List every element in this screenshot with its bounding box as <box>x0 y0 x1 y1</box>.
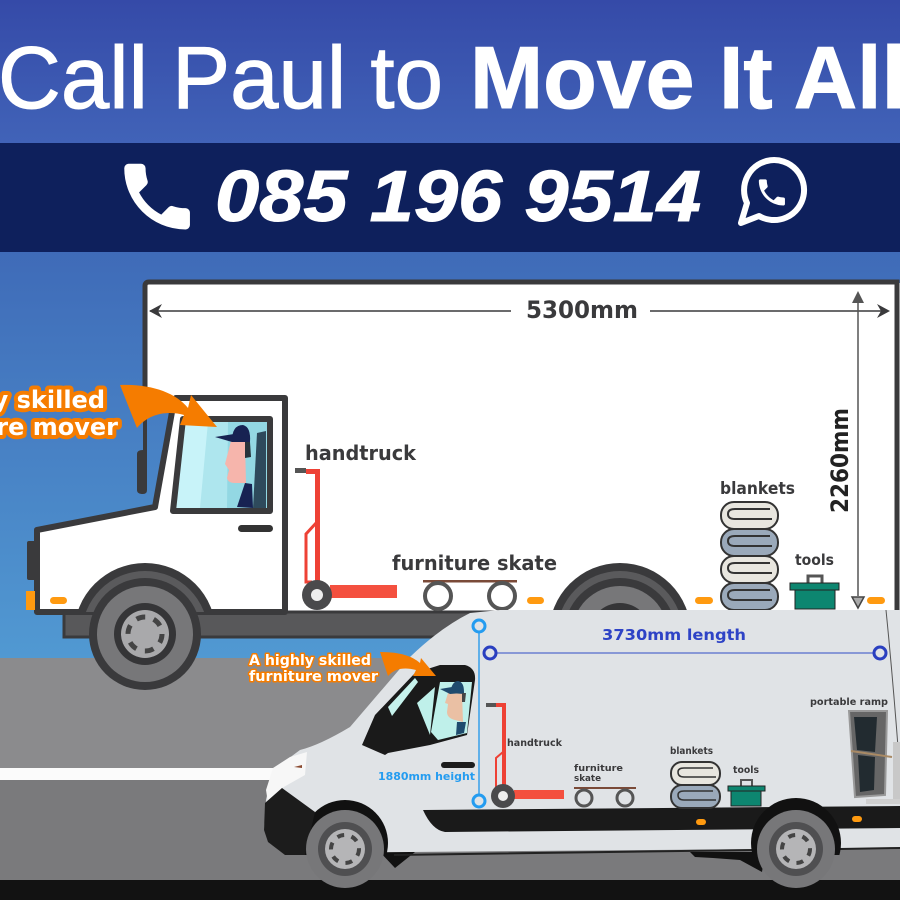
van furniture skate: skate <box>574 774 601 784</box>
truck chassis <box>64 612 900 637</box>
title: Move It All <box>470 28 900 127</box>
box truck <box>26 282 900 705</box>
van rear wheel <box>757 810 835 888</box>
phone number: 085 196 9514 <box>215 157 701 237</box>
truck front wheel <box>78 563 212 690</box>
van headlight <box>266 752 307 803</box>
van height dimension <box>378 620 485 807</box>
header banner <box>0 0 900 143</box>
van window with driver <box>362 665 475 755</box>
van wheel arches <box>305 798 841 855</box>
truck blankets: blankets <box>720 479 795 499</box>
arrow <box>380 652 436 676</box>
length dimension 5300mm <box>149 296 890 324</box>
van callout: A highly skilled <box>249 653 371 669</box>
truck tools <box>790 551 839 609</box>
van length dimension <box>484 626 886 659</box>
van front bumper <box>264 788 315 855</box>
truck cargo box <box>146 283 900 612</box>
van blankets <box>670 746 720 808</box>
length dimension 5300mm: 5300mm <box>526 296 638 324</box>
truck callout: skilled furniture mover <box>0 385 217 441</box>
van blankets: blankets <box>670 746 713 757</box>
van furniture skate: furniture <box>574 764 623 774</box>
icon: phone handset <box>125 165 189 229</box>
truck cab <box>37 398 285 612</box>
cab window with driver <box>173 419 270 511</box>
van lower trim <box>394 848 900 855</box>
truck handtruck <box>295 441 417 610</box>
van <box>249 610 900 888</box>
van body <box>264 610 900 853</box>
label: handtruck <box>305 441 417 465</box>
road background <box>0 252 900 900</box>
van handtruck: handtruck <box>507 738 563 749</box>
height dimension 2260mm: 2260mm <box>826 408 854 513</box>
van tools: tools <box>733 765 759 776</box>
van length dimension: 3730mm length <box>602 626 746 644</box>
icon: whatsapp <box>741 160 804 223</box>
truck furniture skate <box>392 551 557 609</box>
mirror <box>137 410 147 494</box>
van callout <box>249 652 436 685</box>
title: Call Paul to <box>0 28 443 127</box>
truck furniture skate: furniture skate <box>392 551 557 575</box>
truck tools: tools <box>795 551 834 569</box>
van front wheel <box>306 810 384 888</box>
phone band <box>0 143 900 252</box>
arrow to driver <box>120 385 217 428</box>
van height dimension: 1880mm height <box>378 770 475 783</box>
van handtruck <box>486 703 564 808</box>
van tools <box>728 765 765 806</box>
van callout: furniture mover <box>249 669 379 685</box>
truck rear wheel <box>553 563 687 610</box>
height dimension 2260mm <box>826 291 864 608</box>
van portable ramp: portable ramp <box>810 697 888 708</box>
van portable ramp <box>810 697 900 804</box>
truck blankets <box>720 479 795 610</box>
van underbody shadow <box>380 852 765 872</box>
van furniture skate <box>574 764 636 806</box>
